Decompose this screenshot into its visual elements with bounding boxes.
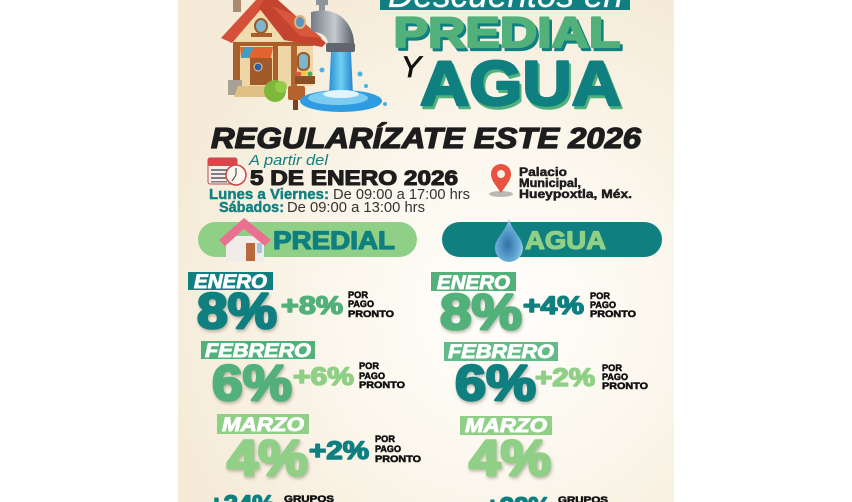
- predial marzo: PAGO: [375, 444, 401, 455]
- predial enero: PAGO: [348, 299, 374, 310]
- predial febrero: 6%: [212, 355, 292, 411]
- predial marzo: 4%: [227, 430, 308, 486]
- predial marzo: MARZO: [222, 415, 304, 436]
- schedule: weekdays: De 09:00 a 17:00 hrs: [333, 186, 470, 203]
- predial febrero: PAGO: [359, 371, 385, 382]
- predial febrero: +6%: [293, 363, 354, 391]
- predial enero: POR: [348, 290, 368, 301]
- predial marzo: POR: [375, 434, 395, 445]
- agua marzo: 4%: [469, 430, 551, 486]
- predial enero: PRONTO: [348, 309, 394, 320]
- agua febrero: 6%: [455, 355, 536, 411]
- column: predial discounts: [188, 272, 421, 502]
- predial enero: [188, 272, 394, 339]
- predial enero: 8%: [197, 283, 277, 339]
- text: location: Hueypoxtla, Méx.: [519, 187, 632, 201]
- icon: water drop: [495, 218, 523, 262]
- title: AGUA: AGUA: [420, 49, 621, 119]
- agua febrero: FEBRERO: [448, 342, 554, 363]
- title: PREDIAL: PREDIAL: [394, 9, 620, 57]
- title: AGUA: AGUA: [422, 52, 623, 122]
- agua enero: ENERO: [437, 273, 510, 294]
- agua enero: PRONTO: [590, 309, 636, 320]
- predial grupos: [209, 491, 334, 502]
- title: PREDIAL: PREDIAL: [396, 12, 623, 60]
- agua marzo: MARZO: [465, 416, 547, 437]
- column: agua discounts: [431, 272, 648, 502]
- predial enero: ENERO: [194, 272, 267, 293]
- agua febrero: [444, 342, 648, 411]
- schedule: saturdays: De 09:00 a 13:00 hrs: [287, 199, 425, 216]
- agua grupos: [485, 493, 608, 502]
- illustration: faucet and water: [300, 0, 387, 112]
- agua enero: POR: [590, 291, 610, 302]
- text: a partir del: A partir del: [248, 152, 329, 169]
- pill: agua: [442, 222, 662, 257]
- predial marzo: PRONTO: [375, 454, 421, 465]
- agua enero: [431, 272, 636, 340]
- text: location: Palacio: [519, 165, 567, 179]
- text: location: [519, 165, 632, 201]
- agua febrero: PRONTO: [602, 381, 648, 392]
- predial marzo: +2%: [309, 437, 369, 465]
- schedule: weekdays: [209, 186, 470, 203]
- pill: agua: AGUA: [525, 227, 606, 255]
- heading: regularizate: REGULARÍZATE ESTE 2026: [211, 122, 642, 155]
- agua febrero: PAGO: [602, 372, 628, 383]
- predial febrero: FEBRERO: [205, 341, 311, 362]
- pill: predial: [198, 222, 417, 257]
- title: Y: Y: [401, 51, 423, 84]
- agua enero: +4%: [523, 292, 584, 320]
- icon: location pin: [489, 164, 513, 197]
- predial febrero: POR: [359, 361, 379, 372]
- text: location: Municipal,: [519, 176, 581, 190]
- icon: calendar and clock: [208, 158, 246, 185]
- schedule: saturdays: [219, 199, 425, 216]
- poster background: [178, 0, 674, 502]
- illustration: house: [221, 0, 326, 110]
- agua febrero: POR: [602, 363, 622, 374]
- predial marzo: [217, 414, 421, 486]
- agua enero: PAGO: [590, 300, 616, 311]
- pill: predial: PREDIAL: [273, 227, 395, 255]
- schedule: weekdays: Lunes a Viernes:: [209, 186, 329, 203]
- schedule: saturdays: Sábados:: [219, 199, 284, 216]
- predial febrero: [201, 341, 405, 411]
- agua enero: 8%: [440, 284, 522, 340]
- icon: pink house: [219, 218, 271, 262]
- predial enero: +8%: [281, 292, 343, 320]
- date: 5 DE ENERO 2026: [250, 167, 458, 190]
- predial febrero: PRONTO: [359, 380, 405, 391]
- agua febrero: +2%: [535, 364, 595, 392]
- agua marzo: [460, 416, 552, 486]
